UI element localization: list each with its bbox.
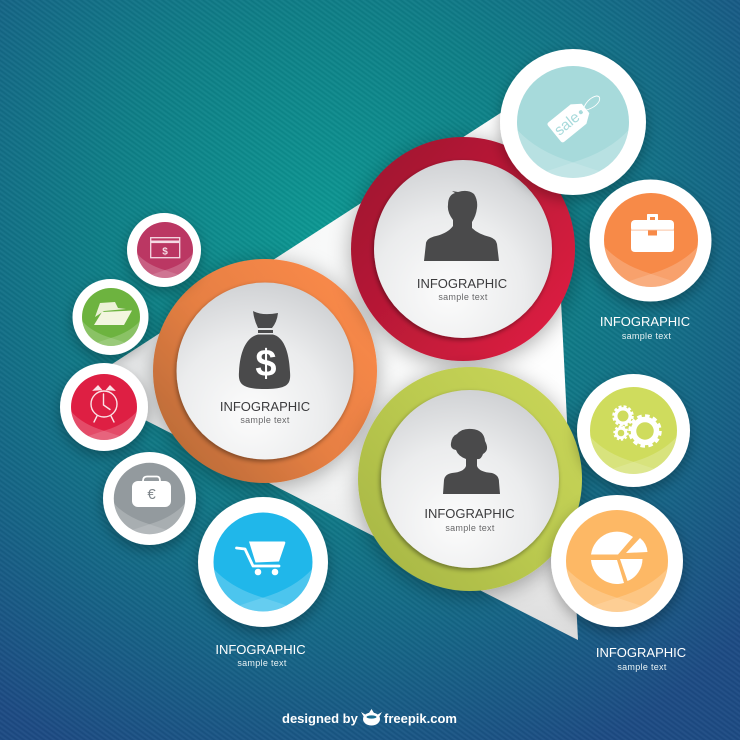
icon: sale tag: sale [551,109,583,139]
footer credit: designed by [282,711,359,726]
badge: card [127,213,201,287]
icon: shopping cart [236,542,285,575]
label: orange [220,399,310,425]
label: cart: INFOGRAPHIC [215,642,306,657]
panel: orange ring [153,259,377,483]
label: cart [215,642,306,668]
label: red: sample text [438,292,488,302]
icon: gears [614,406,660,446]
label: pie: sample text [617,662,667,672]
badge: folder [72,279,148,355]
label: orange: INFOGRAPHIC [220,399,310,414]
icon: payment card: $ [162,246,168,258]
icon: money bag: $ [255,343,277,385]
footer credit: freepik.com [384,711,457,726]
disc: money [176,282,354,460]
label: red: INFOGRAPHIC [417,276,507,291]
icon: alarm clock [91,386,117,422]
icon: money bag [239,311,290,389]
badge: sale tag [500,49,646,195]
label: red [417,276,507,302]
label: briefcase [600,314,690,341]
label: green: sample text [445,523,495,533]
label: cart: sample text [237,658,287,668]
badge: euro case [103,452,196,545]
panel: red ring [351,137,575,361]
label: pie: INFOGRAPHIC [596,645,686,660]
badge: cart [198,497,328,627]
footer credit [282,709,457,726]
icon: man silhouette [424,191,499,261]
label: pie [596,645,686,672]
icon: pie chart [591,532,648,584]
label: green [424,506,515,533]
label: green: INFOGRAPHIC [424,506,515,521]
badge: briefcase [590,180,712,341]
disc: man [374,160,552,338]
panel: green ring [358,367,582,591]
badge: clock [60,363,148,451]
disc: woman [381,390,559,568]
badge: gears [577,374,690,487]
label: orange: sample text [240,415,290,425]
icon: sale tag [547,88,607,143]
icon: folder [94,302,132,325]
label: briefcase: INFOGRAPHIC [600,314,690,329]
icon: freepik mascot [361,709,382,726]
icon: euro bag: € [147,486,156,503]
icon: woman silhouette [443,429,500,494]
icon: briefcase [631,214,674,252]
badge: pie chart [551,495,686,672]
white triangle [78,81,578,640]
label: briefcase: sample text [622,331,671,341]
